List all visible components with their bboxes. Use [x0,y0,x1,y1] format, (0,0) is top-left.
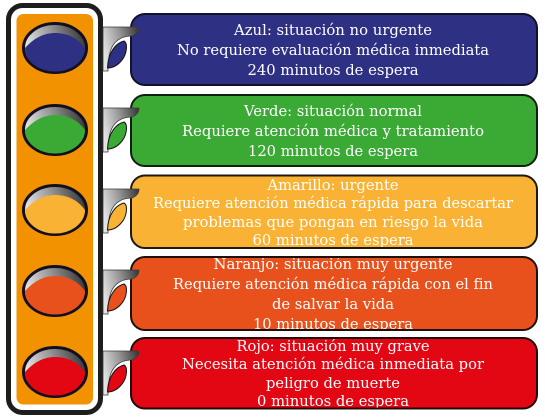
light: verde [24,106,86,154]
text: verde: Requiere atención médica y tratamiento [182,124,484,140]
text: naranjo: Naranjo: situación muy urgente [214,257,452,273]
light: amarillo [24,186,86,234]
text: rojo: Necesita atención médica inmediata por [182,357,484,373]
bracket and leaf: rojo [103,351,139,395]
text: verde: Verde: situación normal [243,104,422,120]
text: verde: 120 minutos de espera [248,144,418,160]
text: azul: Azul: situación no urgente [233,23,432,39]
text: azul: No requiere evaluación médica inmediata [177,43,489,59]
light: azul [24,24,86,72]
text: amarillo: 60 minutos de espera [252,233,414,249]
text: amarillo: Amarillo: urgente [266,178,398,194]
light: naranjo [24,266,86,316]
text: naranjo: Requiere atención médica rápida con el fin [173,277,493,293]
text: amarillo: problemas que pongan en riesgo la vida [183,215,483,231]
text: azul [177,23,489,79]
traffic light housing [8,6,100,412]
text: azul: 240 minutos de espera [248,63,419,79]
text: naranjo: 10 minutos de espera [253,317,413,333]
text: amarillo [153,178,513,249]
panel: naranjo [131,257,537,333]
text: rojo: peligro de muerte [266,376,400,392]
bracket and leaf: azul [103,27,139,71]
text: verde [182,104,484,160]
text: rojo: 0 minutos de espera [257,394,409,410]
text: naranjo [173,257,493,333]
panel: azul [131,14,537,85]
bracket and leaf: verde [103,108,139,152]
text: naranjo: de salvar la vida [272,297,394,313]
text: amarillo: Requiere atención médica rápida para descartar [153,196,513,212]
bracket and leaf: amarillo [103,189,139,233]
text: rojo: Rojo: situación muy grave [236,339,430,355]
panel: amarillo [131,176,537,249]
panel: verde [131,95,537,166]
light: rojo [24,348,86,396]
text: rojo [182,339,484,410]
bracket and leaf: naranjo [103,270,139,314]
panel: rojo [131,338,537,410]
